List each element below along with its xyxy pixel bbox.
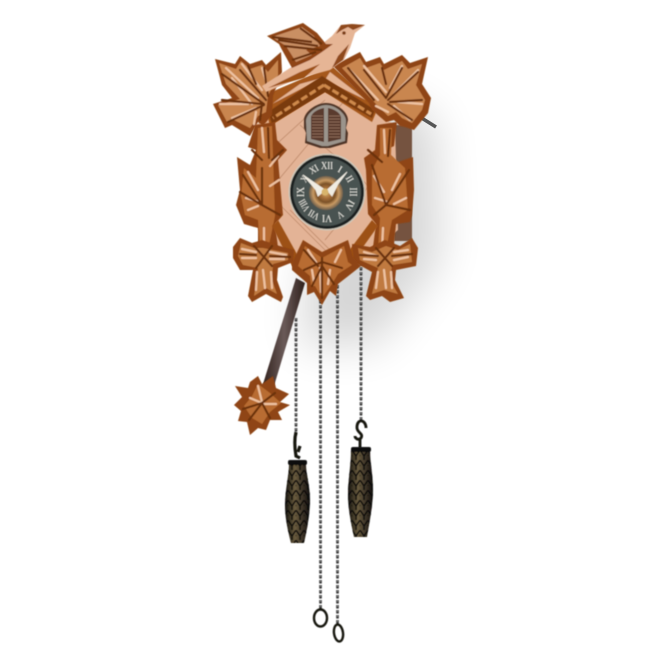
pendulum rod bbox=[263, 278, 305, 386]
roman numerals: II bbox=[343, 174, 355, 185]
roman numerals: VI bbox=[322, 212, 332, 223]
hook: left weight bbox=[295, 432, 300, 458]
bottom right cross leaf bbox=[352, 238, 418, 302]
roman numerals: IX bbox=[296, 186, 307, 197]
ring: inner left pull bbox=[314, 610, 327, 626]
roman numerals: VII bbox=[307, 207, 322, 222]
roman numerals: XI bbox=[308, 163, 321, 177]
hour and minute hands bbox=[303, 172, 347, 196]
roman numerals: V bbox=[334, 208, 345, 221]
roman numerals: IV bbox=[341, 198, 356, 212]
bird head detail bbox=[336, 24, 365, 34]
roman numerals: III bbox=[347, 188, 358, 196]
right column and lower leaf bbox=[364, 122, 414, 255]
clock body bbox=[255, 82, 398, 285]
bird body bbox=[262, 24, 365, 92]
top left leaf bbox=[213, 52, 282, 136]
roman numerals bbox=[296, 161, 358, 223]
pendulum leaf bbox=[234, 376, 290, 435]
weight: left pine cone bbox=[285, 460, 310, 543]
ring: inner right pull bbox=[333, 624, 344, 642]
chain: inner left bbox=[319, 300, 322, 610]
roof trim bbox=[268, 76, 375, 124]
bottom left cross leaf bbox=[233, 238, 294, 302]
chains bbox=[295, 262, 366, 642]
left column and lower leaf bbox=[236, 122, 287, 255]
weight: right pine cone bbox=[348, 447, 373, 537]
bird wing bbox=[267, 23, 333, 68]
cuckoo door bbox=[304, 103, 348, 148]
hanger pin bbox=[420, 117, 436, 127]
hook: right weight bbox=[355, 421, 366, 448]
clock face bbox=[288, 154, 366, 230]
roof joint under leaves bbox=[262, 66, 378, 126]
bottom centre leaf bbox=[292, 240, 361, 305]
bird bbox=[262, 23, 365, 92]
chain: left weight bbox=[295, 318, 297, 435]
chain: right weight bbox=[360, 262, 362, 420]
chain: inner right bbox=[336, 285, 339, 625]
roman numerals: VIII bbox=[297, 197, 313, 213]
roman numerals: X bbox=[299, 173, 311, 185]
hub bbox=[309, 176, 343, 210]
clock side panel bbox=[394, 125, 412, 241]
lower garland arch bbox=[272, 220, 378, 282]
top right leaf bbox=[333, 52, 431, 130]
roman numerals: I bbox=[336, 164, 344, 176]
roman numerals: XII bbox=[321, 161, 333, 172]
drop shadow bbox=[300, 90, 440, 345]
